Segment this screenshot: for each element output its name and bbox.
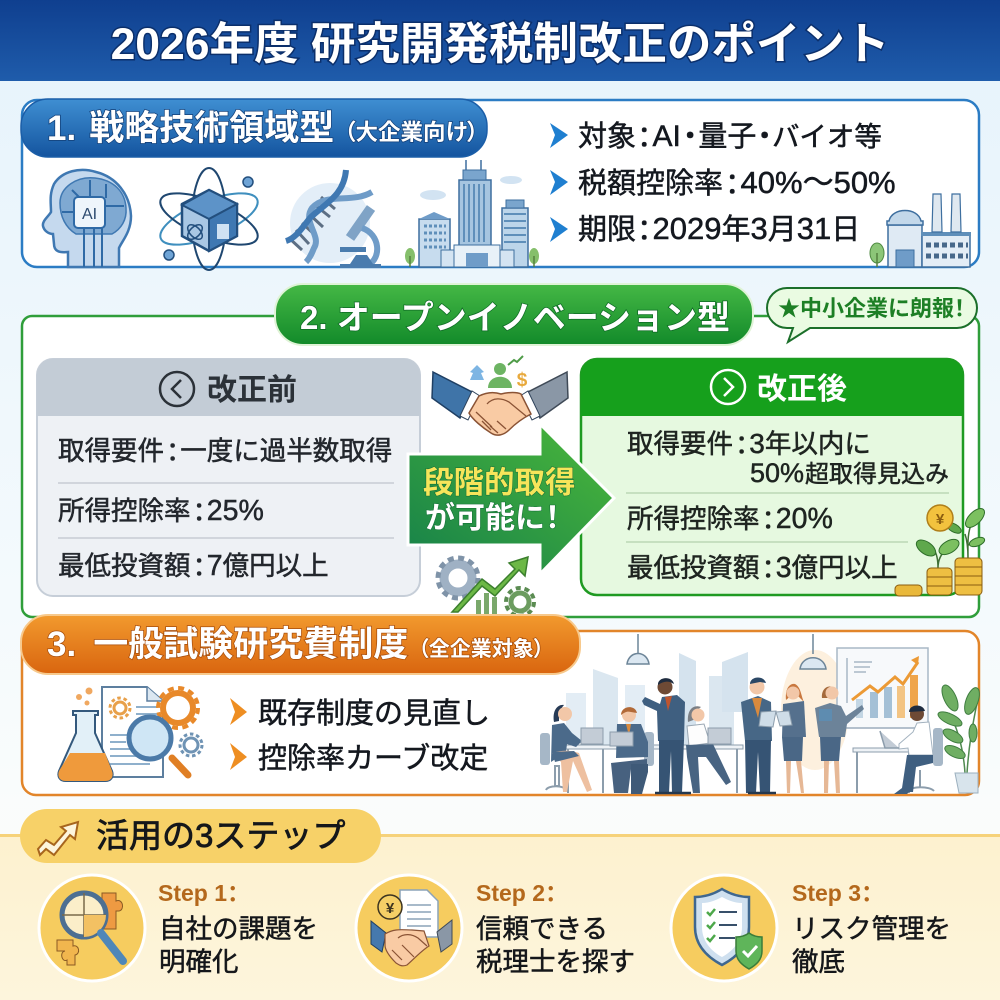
arrow: staged acquisition possible [408,424,614,574]
before rows: 取得要件 [58,436,164,466]
heading pill: section 3: 3. 一般試験研究費制度 （全企業対象） [47,625,544,664]
after rows: 50%超取得見込み [750,458,949,488]
panel: before reform [37,359,420,596]
bullet list: section 3: 控除率カーブ改定 [258,742,488,775]
bullet list: section 1 [550,120,896,248]
person: seated man at laptop [880,705,943,794]
illustration: office team meeting [540,634,982,794]
before rows: ： [192,498,206,528]
step 2 text: 信頼できる [476,914,608,944]
icon: gears and growth arrow [438,557,534,616]
before rows: 所得控除率 [58,496,190,526]
step 2 [356,875,635,981]
bullet list: section 1: 対象 [578,121,636,153]
heading: before: 改正前 [207,374,297,407]
bullet list: section 1: ・量子・バイオ等 [683,121,882,153]
title: 2026年度 研究開発税制改正のポイント [111,20,889,69]
step 2 text: 税理士を探す [476,947,635,977]
step 3 text: ： [861,881,873,907]
after rows: 3年以内に [749,428,871,459]
step 2 text [476,880,635,977]
person: seated woman grey hair [686,706,731,793]
whiteboard chart [837,648,928,728]
heading: before [160,372,297,407]
pendant lamps [627,634,826,669]
step 2 text: ： [545,881,557,907]
heading: after: 改正後 [757,373,847,406]
step 1 text: ： [227,881,239,907]
plant in pot [936,683,982,793]
callout: good news for SMEs [767,288,977,342]
header band [0,0,1000,81]
after rows: ： [762,555,775,585]
icon: AI head [43,170,131,267]
tables [563,745,913,793]
heading pill: section 1: 1. 戦略技術領域型 （大企業向け） [47,109,478,148]
icon: lab flask and magnifier [58,687,202,781]
icon: shield checklist [671,875,777,981]
callout: good news for SMEs: ★中小企業に朗報！ [778,296,965,321]
person: woman with document [776,684,806,793]
step 3 text: リスク管理を [792,914,951,944]
backdrop buildings [566,650,849,770]
icon: document and handshake [356,875,462,981]
person: seated man [610,707,654,794]
after rows: 20% [776,503,833,535]
icon: document and handshake: ¥ [386,900,395,917]
step 3 text: 徹底 [792,947,845,977]
icon: handshake: $ [517,370,528,391]
heading: after [711,370,847,406]
icon: handshake [432,356,568,435]
before rows: 最低投資額 [58,551,190,581]
after rows: 取得要件 [627,429,733,459]
bullet list: section 3: 既存制度の見直し [258,697,490,730]
after rows: 所得控除率 [627,504,760,534]
panel: 3 general R&D [21,615,982,795]
icon: DNA and microscope [286,170,381,268]
before rows: 7億円以上 [207,550,329,582]
step 1 [39,875,318,981]
panel: 1 strategic technology [21,99,979,270]
icon: factory [870,194,971,267]
step 3 text: Step 3 [792,880,861,906]
before rows: ： [192,553,206,583]
before rows [58,436,394,583]
person: standing man with tablet [741,677,776,793]
person: standing man dark [642,678,691,793]
step 1 text: 明確化 [159,947,238,977]
bullet list: section 1: ： [725,170,740,202]
icon: magnifier and puzzle [39,875,145,981]
step 2 text: Step 2 [476,880,545,906]
step 1 text [158,880,318,977]
bullet list: section 1: 2029年3月31日 [653,211,860,246]
step 1 text: Step 1 [158,880,227,906]
after rows: ： [762,506,775,536]
bullet list: section 1: 税額控除率 [578,168,723,200]
arrow: staged acquisition possible: が可能に！ [425,501,560,535]
step 3 [671,875,951,981]
icon: coins and seedling [895,505,988,596]
icon: AI head: AI [82,206,97,223]
heading pill: steps [20,809,381,863]
arrow: staged acquisition possible: 段階的取得 [423,466,576,500]
after rows [626,428,949,585]
bullet list: section 1: AI [653,120,681,153]
heading pill: section 1 [21,99,487,157]
icon: city buildings [405,160,539,267]
heading pill: section 2 [275,284,753,345]
after rows: 3億円以上 [776,552,898,584]
bullet list: section 1: 40%～50% [741,165,896,200]
before rows: 25% [207,495,264,527]
heading pill: section 3 [21,615,580,674]
bullet list: section 3 [230,697,490,775]
person: seated woman [540,705,603,792]
person: woman presenting [815,686,864,793]
step 1 text: 自社の課題を [159,914,318,944]
icon: coins and seedling: ¥ [936,511,945,528]
after rows: ： [735,431,748,461]
before rows: ： [166,438,179,468]
after rows: 最低投資額 [627,553,760,583]
icon: quantum cube [154,168,264,270]
panel: 3 steps [0,809,1000,1000]
before rows: 一度に過半数取得 [180,436,392,466]
panel: 2 open innovation [22,284,988,617]
heading pill: steps: 活用の3ステップ [96,817,345,854]
heading pill: section 2: 2. オープンイノベーション型 [300,299,730,336]
panel: after reform [581,359,963,595]
bullet list: section 1: 期限 [578,214,636,246]
bullet list: section 1: ： [637,216,652,248]
step 3 text [792,880,951,977]
bullet list: section 1: ： [637,123,652,155]
